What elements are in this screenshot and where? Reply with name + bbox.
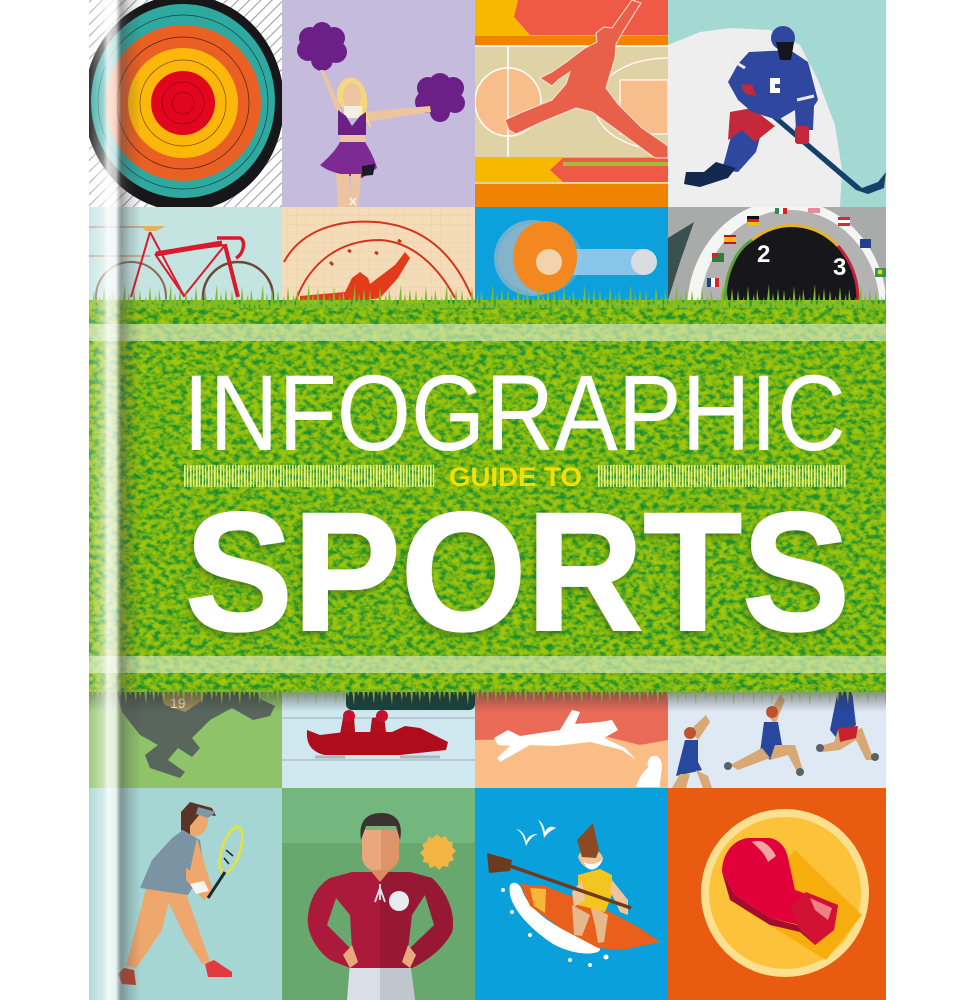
- tile: racing bicycle: [89, 207, 282, 300]
- tennis figure: [118, 802, 247, 985]
- greyhound: [116, 690, 275, 778]
- paddle: [487, 853, 631, 908]
- figure behind: [636, 756, 662, 787]
- tile: coach: [282, 788, 475, 1000]
- tile: archery target: [89, 0, 282, 207]
- book spine gloss: [89, 0, 141, 1000]
- kayak: [520, 884, 660, 950]
- coach figure: [308, 813, 453, 1000]
- birds: [516, 820, 556, 846]
- racquet: [208, 824, 247, 898]
- glove: [722, 838, 838, 945]
- dial numbers: 3: [833, 254, 846, 281]
- title: SPORTS: SPORTS: [185, 477, 850, 666]
- tile: speed gauge with flags: [668, 207, 886, 300]
- title: INFOGRAPHIC: INFOGRAPHIC: [183, 352, 846, 473]
- dial numbers: 2: [757, 241, 770, 268]
- stick: [765, 108, 886, 194]
- subtitle: GUIDE TO with stripes: GUIDE TO: [449, 462, 582, 492]
- swimmer: [300, 252, 410, 304]
- jumping player silhouette: [505, 0, 668, 158]
- cheerleader figure: [320, 70, 431, 207]
- left pom-pom: [297, 22, 347, 71]
- tile: kayaker: [475, 788, 668, 1000]
- tile: swimmer: [475, 692, 668, 788]
- subtitle: GUIDE TO with stripes: [184, 462, 847, 492]
- tile: cheerleader: [282, 0, 475, 207]
- bicycle: [96, 226, 273, 332]
- dial numbers: [757, 241, 846, 281]
- athlete 1: [672, 715, 712, 788]
- tile: basketball: [475, 0, 668, 207]
- athlete 3: [816, 690, 879, 761]
- bobsled: [307, 710, 448, 757]
- tile: boxing glove: [668, 788, 886, 1000]
- ice patch: [668, 28, 842, 207]
- tile: long jump sequence: [668, 692, 886, 788]
- tile: bobsleigh: [282, 692, 475, 788]
- swimmer silhouette: [494, 710, 636, 762]
- tile: table tennis: [475, 207, 668, 300]
- paddler: [572, 823, 628, 943]
- hockey player: [684, 26, 818, 187]
- tile: swimming turn diagram: [282, 207, 475, 300]
- panel: grass field: [89, 282, 886, 712]
- foam: [510, 883, 600, 954]
- right pom-pom: [415, 73, 465, 122]
- athlete 2: [724, 695, 804, 776]
- tile: ice hockey: [668, 0, 886, 207]
- tile: tennis player: [89, 788, 282, 1000]
- race number: 19: [170, 695, 186, 711]
- tile: greyhound racing: [89, 692, 282, 788]
- sun badge: [420, 834, 456, 870]
- flags: [707, 208, 886, 287]
